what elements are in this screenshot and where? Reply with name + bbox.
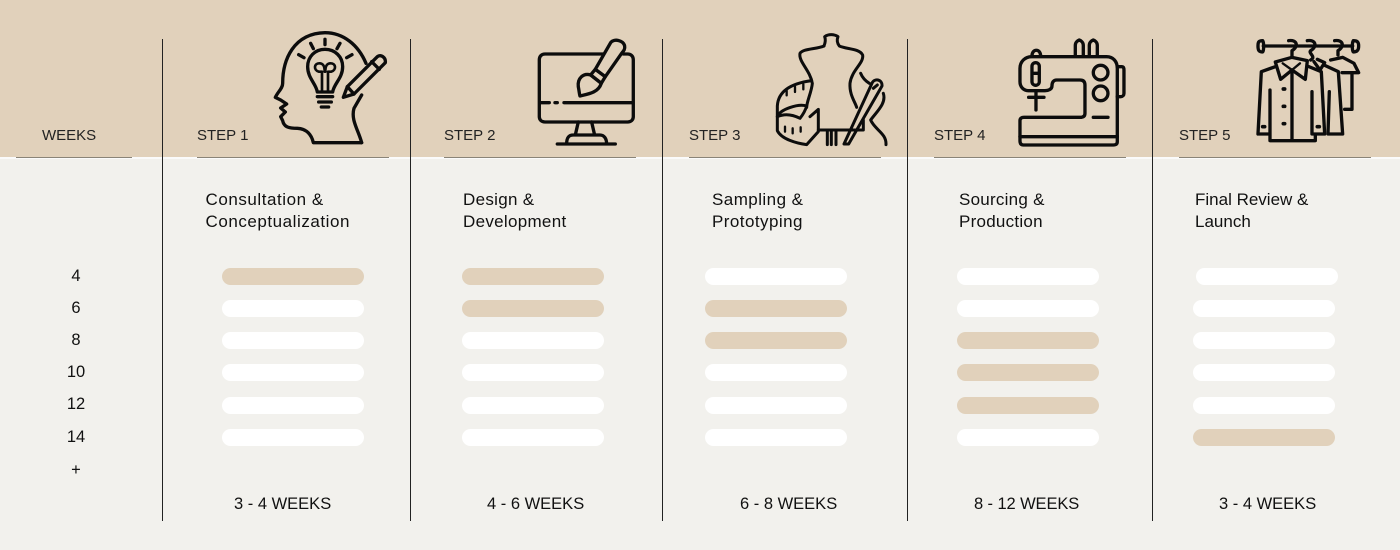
column heading: weeks: WEEKS <box>42 127 96 144</box>
duration: step 5: 3 - 4 WEEKS <box>1219 495 1316 513</box>
timeline bars: step 1 <box>222 268 364 446</box>
icon: sewing machine <box>1020 40 1124 145</box>
column heading: step 4: STEP 4 <box>934 127 985 144</box>
step title: sourcing: Production <box>959 212 1043 231</box>
step title: sourcing: Sourcing & <box>959 190 1045 209</box>
duration: step 2: 4 - 6 WEEKS <box>487 495 584 513</box>
week scale <box>67 267 85 479</box>
column heading: step 2: STEP 2 <box>444 127 495 144</box>
step title: design: Development <box>463 212 566 231</box>
timeline bars: step 3 <box>705 268 847 446</box>
week scale: 12 <box>67 395 85 413</box>
step title: sampling: Sampling & <box>712 190 803 209</box>
column heading: step 3: STEP 3 <box>689 127 740 144</box>
step title: consultation <box>206 190 350 231</box>
step title: final review <box>1195 190 1308 231</box>
step title: final review: Launch <box>1195 212 1251 231</box>
step title: sampling: Prototyping <box>712 212 803 231</box>
step title: design: Design & <box>463 190 534 209</box>
week scale: 8 <box>71 331 81 349</box>
step title: sourcing <box>959 190 1045 231</box>
timeline bars: step 4 <box>957 268 1099 446</box>
header band <box>0 0 1400 157</box>
duration: step 4: 8 - 12 WEEKS <box>974 495 1079 513</box>
week scale: 4 <box>71 267 81 285</box>
icon: head with lightbulb and pencil <box>275 33 385 143</box>
duration: step 3: 6 - 8 WEEKS <box>740 495 837 513</box>
column heading: step 5: STEP 5 <box>1179 127 1230 144</box>
duration: step 1: 3 - 4 WEEKS <box>234 495 331 513</box>
timeline bars: step 5 <box>1193 268 1338 446</box>
week scale: 6 <box>71 299 81 317</box>
week scale: 14 <box>67 428 85 446</box>
week scale: 10 <box>67 363 85 381</box>
icon: clothes on a rail <box>1258 40 1359 141</box>
timeline bars: step 2 <box>462 268 604 446</box>
column heading: step 1: STEP 1 <box>197 127 248 144</box>
step title: consultation: Conceptualization <box>206 212 350 231</box>
step title: design <box>463 190 566 231</box>
step title: final review: Final Review & <box>1195 190 1308 209</box>
week scale: + <box>71 461 81 479</box>
step title: consultation: Consultation & <box>206 190 324 209</box>
icon: dress form, tape measure and needle <box>777 35 886 145</box>
step title: sampling <box>712 190 803 231</box>
icon: monitor with paint brush <box>539 40 633 144</box>
